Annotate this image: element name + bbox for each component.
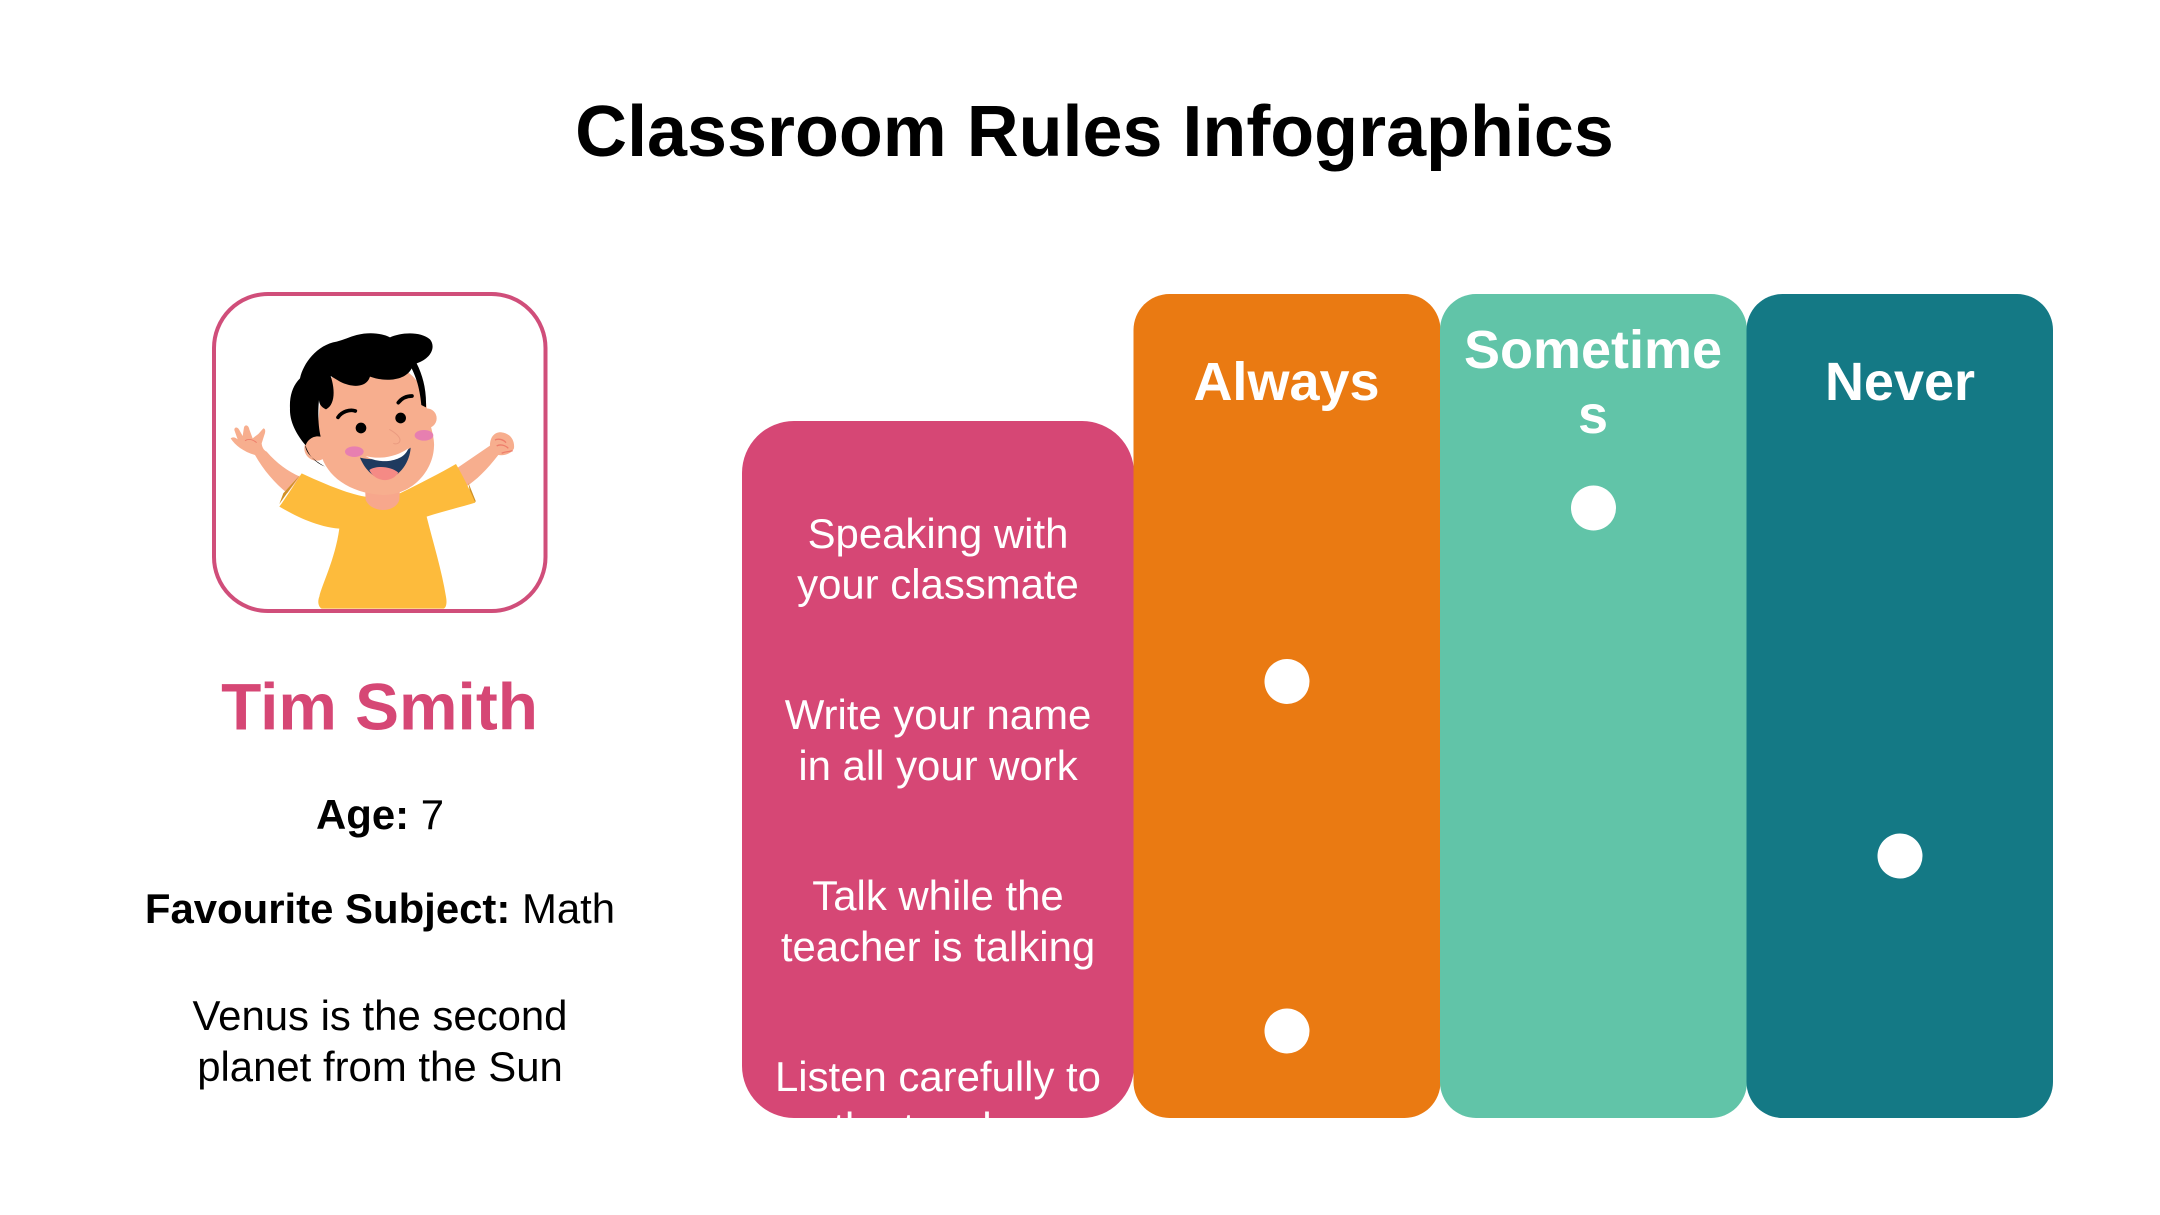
rule texts clipped by card: in all your work — [798, 742, 1078, 789]
panel: never column — [1746, 294, 2053, 1118]
description: Venus is the second — [193, 992, 567, 1039]
rule texts clipped by card: your classmate — [797, 560, 1079, 608]
avatar frame with boy illustration — [214, 294, 546, 611]
dot: rule 3 — [1878, 834, 1922, 878]
rule texts clipped by card: teacher is talking — [781, 923, 1095, 970]
dot: rule 1 — [1571, 486, 1616, 530]
panel: always column — [1134, 294, 1440, 1118]
rule texts clipped by card: the teacher — [833, 1104, 1043, 1151]
panel: rules list — [742, 421, 1134, 1151]
panel: sometimes column: s — [1578, 385, 1608, 445]
rule texts clipped by card — [775, 510, 1101, 1151]
panel: sometimes column — [1440, 294, 1747, 1118]
rule texts clipped by card: Talk while the — [812, 872, 1064, 919]
icon: smiling boy — [231, 333, 514, 609]
favourite subject: Favourite Subject: Math — [145, 885, 615, 932]
rule texts clipped by card: Write your name — [785, 691, 1091, 738]
dot: rule 2 — [1264, 659, 1310, 704]
panel: never column: Never — [1825, 352, 1975, 412]
name: Tim Smith — [221, 670, 538, 744]
panel: sometimes column: Sometime — [1464, 320, 1722, 380]
dot: always rule 4 — [1264, 1008, 1310, 1054]
title: Classroom Rules Infographics — [575, 92, 1614, 172]
panel: always column: Always — [1193, 352, 1380, 412]
rule texts clipped by card: Listen carefully to — [775, 1053, 1101, 1100]
panel: student profile — [145, 294, 615, 1090]
rule texts clipped by card: Speaking with — [808, 510, 1068, 557]
age: Age: 7 — [316, 791, 444, 838]
description: planet from the Sun — [197, 1043, 563, 1090]
